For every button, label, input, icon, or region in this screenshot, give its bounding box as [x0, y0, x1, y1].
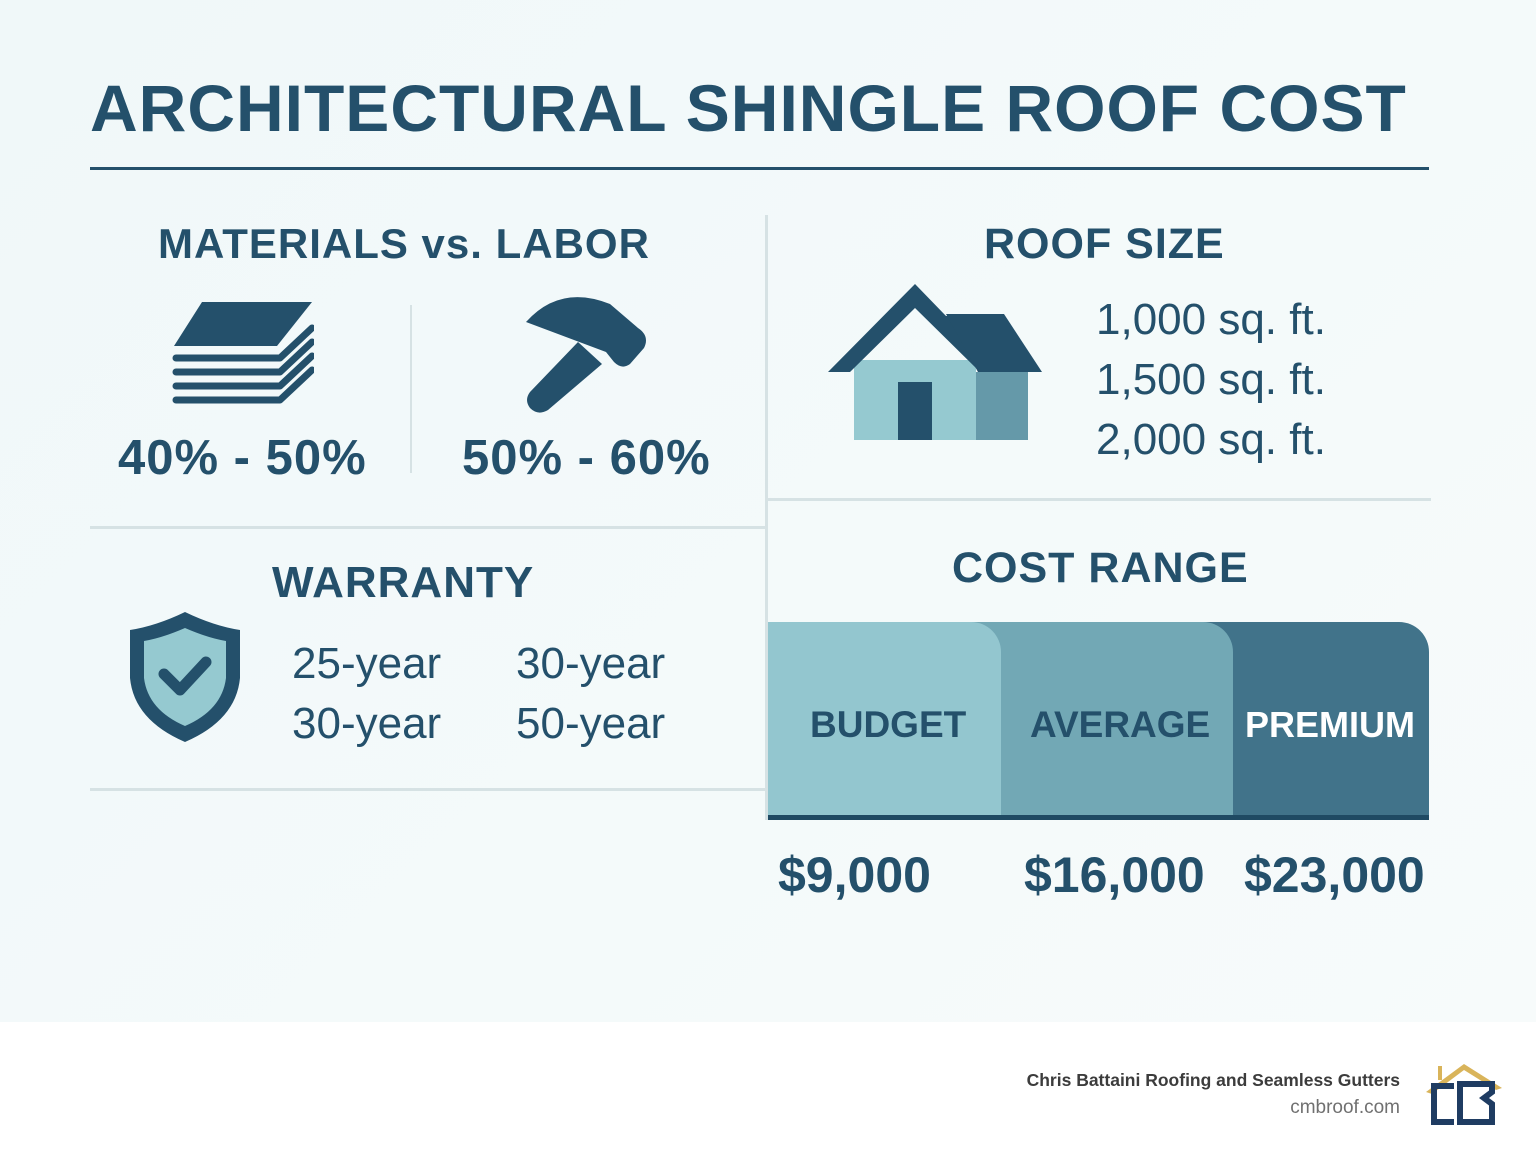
panel: roof size [828, 220, 1326, 464]
text: sizes [1096, 295, 1326, 464]
bar chart: cost tiers: PREMIUM [1245, 704, 1415, 745]
panel: cost range [768, 544, 1429, 903]
text: materials percent: 40% - 50% [118, 431, 367, 485]
text: warranty terms: 25-year [292, 639, 441, 688]
icon: shield check [130, 612, 240, 742]
text: sizes: 1,500 sq. ft. [1096, 355, 1326, 404]
panel: warranty [130, 558, 665, 748]
footer text: Chris Battaini Roofing and Seamless Gutters [1027, 1070, 1400, 1090]
bar chart: cost tiers: BUDGET [810, 704, 966, 745]
footer text [1027, 1070, 1400, 1118]
text: warranty terms [292, 639, 441, 748]
heading: roof size: ROOF SIZE [984, 220, 1225, 268]
bar chart: cost tiers [768, 622, 1429, 820]
icon: shingles stack [172, 302, 314, 404]
logo: CB house [1426, 1064, 1502, 1125]
text: sizes: 1,000 sq. ft. [1096, 295, 1326, 344]
panel: cost range: $16,000 [1024, 847, 1205, 903]
text: prices: $9,000 [778, 847, 931, 903]
panel: warranty: 30-year [516, 639, 665, 688]
panel: cost range: $23,000 [1244, 847, 1425, 903]
footer [0, 1022, 1536, 1154]
panel: warranty: 50-year [516, 699, 665, 748]
heading: materials vs labor: MATERIALS vs. LABOR [158, 220, 650, 267]
icon: house [828, 284, 1042, 440]
heading: warranty: WARRANTY [272, 558, 534, 607]
icon: hammer [526, 297, 646, 413]
text: sizes: 2,000 sq. ft. [1096, 415, 1326, 464]
title: ARCHITECTURAL SHINGLE ROOF COST [90, 71, 1407, 145]
bar chart: cost tiers: AVERAGE [1030, 704, 1210, 745]
panel: materials vs labor [118, 220, 711, 485]
text: labor percent: 50% - 60% [462, 431, 711, 485]
heading: cost range: COST RANGE [952, 544, 1249, 592]
footer text: cmbroof.com [1290, 1097, 1400, 1118]
text: warranty terms: 30-year [292, 699, 441, 748]
